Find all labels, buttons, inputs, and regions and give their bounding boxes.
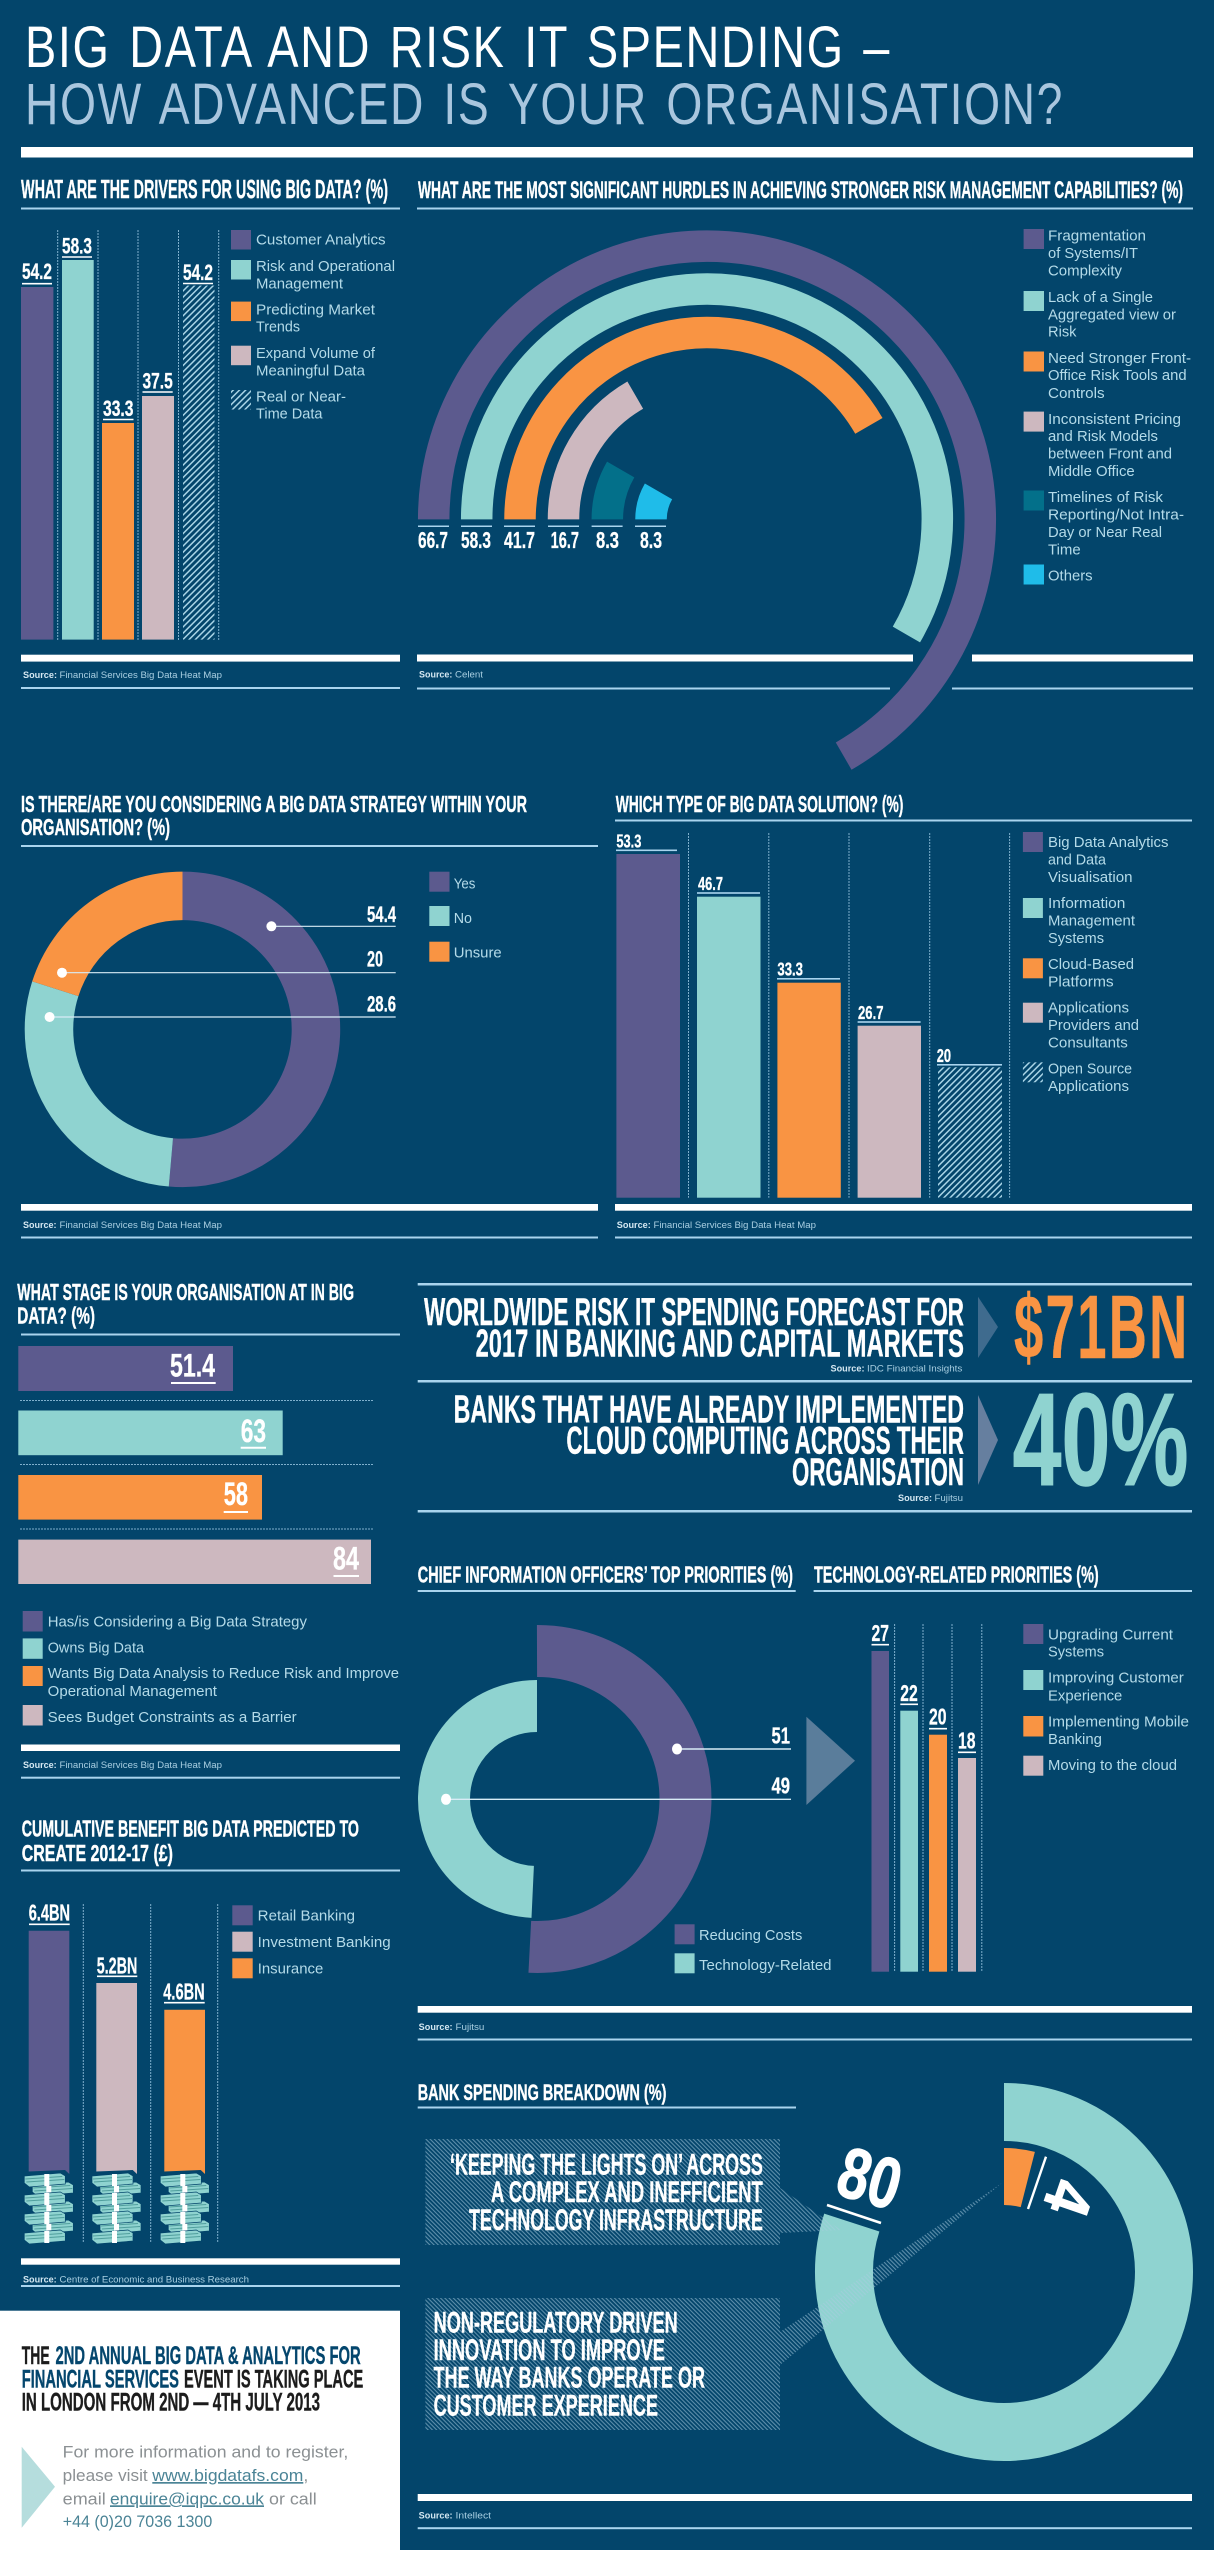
- bar chart: drivers: 54.2: [22, 259, 52, 284]
- legend: strategy: Yes: [454, 876, 475, 893]
- bar chart: benefit: 4.6BN: [163, 1979, 205, 2005]
- title: [25, 15, 1064, 137]
- legend: solution: Cloud-Based: [1048, 956, 1134, 973]
- contact details: www.bigdatafs.com: [151, 2466, 303, 2485]
- contact details: or call: [269, 2489, 317, 2508]
- source: stage: Source:: [23, 1760, 57, 1770]
- legend: solution: Systems: [1048, 930, 1104, 947]
- contact details: email: [63, 2489, 106, 2508]
- source: CIO priorities: [419, 2022, 484, 2032]
- legend: hurdles: Office Risk Tools and: [1048, 367, 1187, 384]
- legend: strategy: [429, 872, 502, 962]
- statement: risk IT spending forecast: IDC Financial Insights: [867, 1364, 963, 1374]
- leader lines and values: strategy: 54.4: [367, 902, 397, 927]
- radial arc chart: hurdles: [434, 246, 980, 756]
- contact details: +44 (0)20 7036 1300: [63, 2512, 212, 2531]
- legend: solution: Providers and: [1048, 1017, 1139, 1034]
- legend: hurdles: Aggregated view or: [1048, 306, 1176, 323]
- heading: bank spending: BANK SPENDING BREAKDOWN (%): [418, 2080, 666, 2105]
- panel: type of big data solution: [615, 791, 1192, 1238]
- legend: stage: Sees Budget Constraints as a Barrier: [48, 1709, 297, 1726]
- bar chart: solution: 53.3: [616, 831, 641, 851]
- legend: solution: Big Data Analytics: [1048, 834, 1168, 851]
- panel: headline statistics: [418, 1278, 1192, 1513]
- legend: drivers: Expand Volume of: [256, 345, 376, 362]
- bar chart: solution: 46.7: [698, 874, 723, 894]
- legend: drivers: Risk and Operational: [256, 258, 395, 275]
- horizontal bar chart: stage: 84: [333, 1541, 359, 1577]
- panel: stage in big data: [17, 1279, 400, 1779]
- legend: benefit: Investment Banking: [258, 1934, 391, 1951]
- legend: CIO priorities: Reducing Costs: [699, 1927, 802, 1944]
- bar chart: drivers: 54.2: [183, 260, 213, 285]
- legend: technology priorities: [1023, 1624, 1189, 1776]
- legend: hurdles: Controls: [1048, 385, 1105, 402]
- arc value labels: 41.7: [504, 527, 535, 553]
- legend: hurdles: Others: [1048, 568, 1093, 585]
- legend: hurdles: Time: [1048, 542, 1081, 558]
- event heading: 2ND ANNUAL BIG DATA & ANALYTICS FOR: [56, 2342, 361, 2370]
- bar chart: benefit: 5.2BN: [97, 1952, 137, 1978]
- callout: keeping the lights on: ‘KEEPING THE LIGHTS ON’ ACROSS: [450, 2148, 763, 2181]
- event heading: EVENT IS TAKING PLACE: [184, 2365, 363, 2393]
- bar chart: solution: 20: [937, 1046, 951, 1066]
- legend: strategy: Unsure: [454, 945, 502, 962]
- callout: keeping the lights on: [425, 2139, 841, 2245]
- source: CIO priorities: Fujitsu: [456, 2022, 484, 2032]
- legend: technology priorities: Upgrading Current: [1048, 1626, 1174, 1643]
- event heading: FINANCIAL SERVICES: [22, 2365, 179, 2393]
- legend: hurdles: and Risk Models: [1048, 428, 1158, 445]
- source: hurdles: Source:: [419, 670, 452, 680]
- source: stage: Financial Services Big Data Heat Map: [60, 1760, 222, 1770]
- icon: money stack 3: [160, 2173, 209, 2244]
- heading: benefit: [22, 1816, 359, 1866]
- donut chart: 80 percent: [844, 2112, 1164, 2432]
- legend: CIO priorities: Technology-Related: [699, 1957, 832, 1974]
- legend: solution: Platforms: [1048, 974, 1114, 991]
- legend: technology priorities: Moving to the cloud: [1048, 1757, 1177, 1774]
- horizontal bar chart: stage: 63: [241, 1413, 266, 1449]
- bar chart: benefit: [29, 1900, 205, 2174]
- bar chart: technology priorities: 20: [929, 1704, 946, 1730]
- legend: hurdles: Reporting/Not Intra-: [1048, 506, 1184, 523]
- bar chart: benefit: 6.4BN: [29, 1900, 70, 1926]
- legend: CIO priorities: [675, 1924, 832, 1974]
- legend: stage: Operational Management: [48, 1683, 218, 1700]
- callout: non-regulatory innovation: INNOVATION TO IMPROVE: [434, 2334, 665, 2367]
- bar chart: drivers: [21, 233, 214, 640]
- source: drivers: Financial Services Big Data Heat Map: [60, 670, 222, 680]
- panel: hurdles in risk management: [417, 177, 1193, 756]
- icon: arrow: [22, 2447, 55, 2528]
- legend: solution: and Data: [1048, 852, 1107, 869]
- leader lines and values: CIO priorities: 51: [772, 1722, 790, 1748]
- bar chart: solution: [616, 831, 1002, 1198]
- contact details: please visit: [63, 2466, 148, 2485]
- source: CIO priorities: Source:: [419, 2022, 453, 2032]
- arc value labels: 8.3: [596, 527, 619, 553]
- legend: stage: [23, 1611, 399, 1726]
- panel: big data strategy: [21, 791, 598, 1238]
- heading: benefit: CREATE 2012-17 (£): [22, 1840, 173, 1866]
- callout: non-regulatory innovation: CUSTOMER EXPERIENCE: [434, 2390, 658, 2423]
- legend: drivers: Real or Near-: [256, 389, 346, 406]
- callout: keeping the lights on: TECHNOLOGY INFRASTRUCTURE: [469, 2204, 763, 2237]
- legend: drivers: Time Data: [256, 406, 323, 423]
- heading: strategy: ORGANISATION? (%): [21, 814, 170, 840]
- legend: drivers: [231, 230, 395, 423]
- heading: strategy: IS THERE/ARE YOU CONSIDERING A BIG DATA STRATEGY WITHIN YOUR: [21, 791, 527, 817]
- legend: solution: Information: [1048, 895, 1125, 912]
- icon: money stack 1: [24, 2173, 73, 2244]
- legend: drivers: Trends: [256, 318, 300, 336]
- legend: technology priorities: Experience: [1048, 1687, 1122, 1704]
- legend: drivers: Meaningful Data: [256, 363, 366, 380]
- arc value labels: 8.3: [640, 527, 662, 553]
- event heading: THE: [22, 2342, 50, 2370]
- donut segment: 4 percent: [1004, 2176, 1028, 2180]
- horizontal bar chart: stage: 58: [224, 1476, 248, 1512]
- source: bank spending: [419, 2510, 492, 2520]
- panel: event call to action: [0, 2311, 400, 2560]
- legend: hurdles: Complexity: [1048, 263, 1122, 280]
- horizontal bar chart: stage: 51.4: [170, 1347, 215, 1383]
- legend: solution: Applications: [1048, 1000, 1129, 1017]
- statement: cloud computing: ORGANISATION: [792, 1451, 964, 1494]
- legend: hurdles: Day or Near Real: [1048, 524, 1162, 541]
- title: BIG DATA AND RISK IT SPENDING –: [25, 15, 891, 80]
- legend: technology priorities: Systems: [1048, 1644, 1104, 1661]
- source: hurdles: Celent: [455, 670, 484, 680]
- legend: solution: Consultants: [1048, 1035, 1128, 1052]
- legend: benefit: Insurance: [258, 1960, 323, 1977]
- bar chart: solution: 33.3: [777, 960, 803, 980]
- statement: risk IT spending forecast: Source:: [830, 1364, 864, 1374]
- donut chart: strategy: [49, 896, 316, 1163]
- bar chart: drivers: 37.5: [142, 368, 173, 393]
- source: bank spending: Source:: [419, 2510, 453, 2520]
- leader lines and values: CIO priorities: [441, 1722, 791, 1805]
- legend: stage: Has/is Considering a Big Data Strategy: [48, 1614, 307, 1631]
- source: bank spending: Intellect: [456, 2510, 492, 2520]
- leader lines and values: strategy: 28.6: [367, 992, 396, 1017]
- heading: strategy: [21, 791, 527, 840]
- bar chart: technology priorities: 18: [958, 1728, 976, 1754]
- legend: hurdles: of Systems/IT: [1048, 245, 1138, 262]
- legend: hurdles: Timelines of Risk: [1048, 489, 1164, 506]
- arc value labels: 58.3: [461, 527, 491, 553]
- bar chart: drivers: 33.3: [103, 396, 134, 421]
- heading: stage: [17, 1279, 354, 1329]
- donut chart: CIO priorities: [444, 1651, 685, 1947]
- legend: stage: Owns Big Data: [48, 1640, 145, 1657]
- heading: benefit: CUMULATIVE BENEFIT BIG DATA PREDICTED TO: [22, 1816, 359, 1842]
- legend: drivers: Customer Analytics: [256, 232, 386, 249]
- callout: non-regulatory innovation: [425, 2183, 1002, 2430]
- legend: solution: [1023, 832, 1168, 1095]
- legend: technology priorities: Banking: [1048, 1731, 1102, 1748]
- value: 80: 80: [829, 2132, 910, 2226]
- panel: cumulative benefit: [21, 1816, 400, 2287]
- heading: stage: WHAT STAGE IS YOUR ORGANISATION AT IN BIG: [17, 1279, 354, 1305]
- legend: hurdles: Middle Office: [1048, 463, 1135, 480]
- legend: solution: Applications: [1048, 1078, 1129, 1095]
- legend: hurdles: Fragmentation: [1048, 228, 1146, 245]
- legend: hurdles: Risk: [1048, 324, 1077, 340]
- horizontal bar chart: stage: [18, 1346, 371, 1584]
- source: solution: Financial Services Big Data Heat Map: [654, 1220, 816, 1230]
- contact details: enquire@iqpc.co.uk: [110, 2489, 265, 2508]
- arc value labels: 16.7: [551, 527, 579, 553]
- arc value labels: [418, 526, 666, 553]
- callout: non-regulatory innovation: NON-REGULATORY DRIVEN: [434, 2306, 678, 2339]
- heading: drivers: WHAT ARE THE DRIVERS FOR USING BIG DATA? (%): [21, 174, 388, 204]
- bar chart: technology priorities: 22: [900, 1680, 918, 1706]
- leader lines and values: CIO priorities: 49: [772, 1772, 790, 1798]
- event heading: [22, 2342, 363, 2417]
- arc value labels: 66.7: [418, 527, 448, 553]
- bar chart: solution: 26.7: [858, 1003, 884, 1023]
- callout: keeping the lights on: A COMPLEX AND INEFFICIENT: [491, 2176, 763, 2209]
- statement: cloud computing: [454, 1389, 964, 1503]
- legend: hurdles: Inconsistent Pricing: [1048, 411, 1181, 428]
- bar chart: drivers: 58.3: [62, 233, 92, 258]
- value: 4: 4: [1029, 2171, 1109, 2225]
- source: solution: Source:: [617, 1220, 651, 1230]
- statement: risk IT spending forecast: [424, 1291, 964, 1374]
- panel: drivers for using big data: [21, 174, 400, 689]
- arrow: [978, 1395, 998, 1485]
- source: benefit: Centre of Economic and Business Research: [60, 2274, 249, 2284]
- leader lines and values: strategy: 20: [367, 947, 383, 972]
- legend: drivers: Management: [256, 275, 344, 292]
- legend: strategy: No: [454, 910, 472, 927]
- legend: benefit: Retail Banking: [258, 1908, 355, 1925]
- source: benefit: Source:: [23, 2274, 57, 2284]
- arrow: [806, 1717, 855, 1805]
- source: strategy: Financial Services Big Data Heat Map: [60, 1220, 222, 1230]
- source: hurdles: [419, 670, 484, 680]
- contact details: [63, 2443, 348, 2531]
- bar chart: technology priorities: [872, 1620, 976, 1972]
- contact details: ,: [304, 2466, 308, 2485]
- legend: hurdles: [1024, 228, 1191, 585]
- statement: cloud computing: Fujitsu: [934, 1493, 963, 1503]
- callout: non-regulatory innovation: THE WAY BANKS OPERATE OR: [434, 2362, 705, 2395]
- panel: CIO priorities: [418, 1562, 1192, 2040]
- legend: hurdles: Need Stronger Front-: [1048, 350, 1191, 367]
- icon: money stack 2: [92, 2173, 141, 2244]
- legend: drivers: Predicting Market: [256, 302, 376, 318]
- arrow: [978, 1297, 998, 1358]
- legend: hurdles: between Front and: [1048, 446, 1172, 463]
- heading: stage: DATA? (%): [17, 1303, 95, 1329]
- legend: benefit: [232, 1905, 391, 1978]
- event heading: IN LONDON FROM 2ND — 4TH JULY 2013: [22, 2389, 320, 2417]
- legend: stage: Wants Big Data Analysis to Reduce Risk and Improve: [48, 1665, 399, 1682]
- legend: hurdles: Lack of a Single: [1048, 289, 1153, 306]
- legend: solution: Open Source: [1048, 1061, 1132, 1078]
- heading: solution: WHICH TYPE OF BIG DATA SOLUTION? (%): [616, 791, 903, 817]
- legend: technology priorities: Implementing Mobile: [1048, 1713, 1189, 1730]
- bar chart: technology priorities: 27: [872, 1620, 889, 1646]
- source: strategy: Source:: [23, 1220, 56, 1230]
- panel: bank spending breakdown: [418, 2080, 1192, 2529]
- legend: solution: Visualisation: [1048, 869, 1132, 886]
- contact details: For more information and to register,: [63, 2443, 348, 2462]
- heading: CIO priorities: CHIEF INFORMATION OFFICERS’ TOP PRIORITIES (%): [418, 1562, 793, 1588]
- statement: cloud computing: Source:: [898, 1493, 932, 1503]
- legend: solution: Management: [1048, 913, 1136, 930]
- legend: technology priorities: Improving Customer: [1048, 1670, 1184, 1687]
- leader lines and values: strategy: [45, 902, 397, 1022]
- source: drivers: Source:: [23, 670, 57, 680]
